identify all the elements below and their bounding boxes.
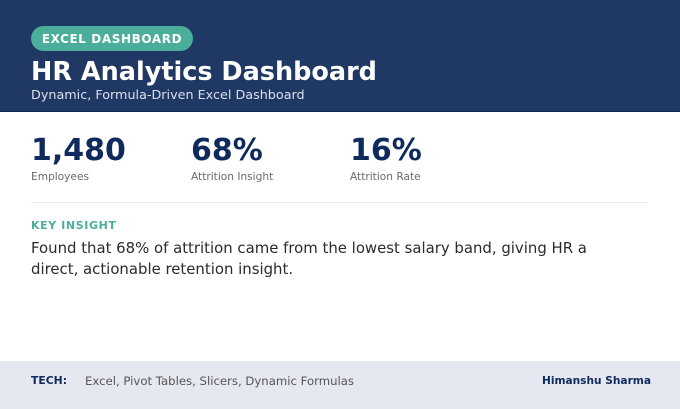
badge: Excel Dashboard: [31, 26, 193, 51]
header banner: [0, 0, 680, 112]
tech list: Excel, Pivot Tables, Slicers, Dynamic Formulas: [85, 374, 354, 388]
key insight text: Found that 68% of attrition came from the lowest salary band, giving HR a: [31, 239, 587, 257]
attrition rate label: Attrition Rate: [350, 171, 421, 183]
stat: employees: [31, 133, 126, 183]
key insight block: [31, 219, 587, 278]
badge: Excel Dashboard: EXCEL DASHBOARD: [42, 32, 182, 46]
attrition rate value: 16%: [350, 133, 422, 168]
attrition insight label: Attrition Insight: [191, 171, 273, 183]
stat: attrition insight: [191, 133, 273, 183]
tech label: TECH:: [31, 374, 67, 387]
key insight heading: KEY INSIGHT: [31, 219, 116, 232]
attrition insight value: 68%: [191, 133, 263, 168]
footer bar: [0, 361, 680, 409]
stat: attrition rate: [350, 133, 422, 183]
author: Himanshu Sharma: [542, 375, 651, 387]
employees value: 1,480: [31, 133, 126, 168]
employees label: Employees: [31, 171, 89, 183]
key insight text: direct, actionable retention insight.: [31, 260, 293, 278]
title: HR Analytics Dashboard: [31, 57, 377, 87]
subtitle: Dynamic, Formula-Driven Excel Dashboard: [31, 88, 305, 103]
key insight text: [31, 239, 587, 278]
